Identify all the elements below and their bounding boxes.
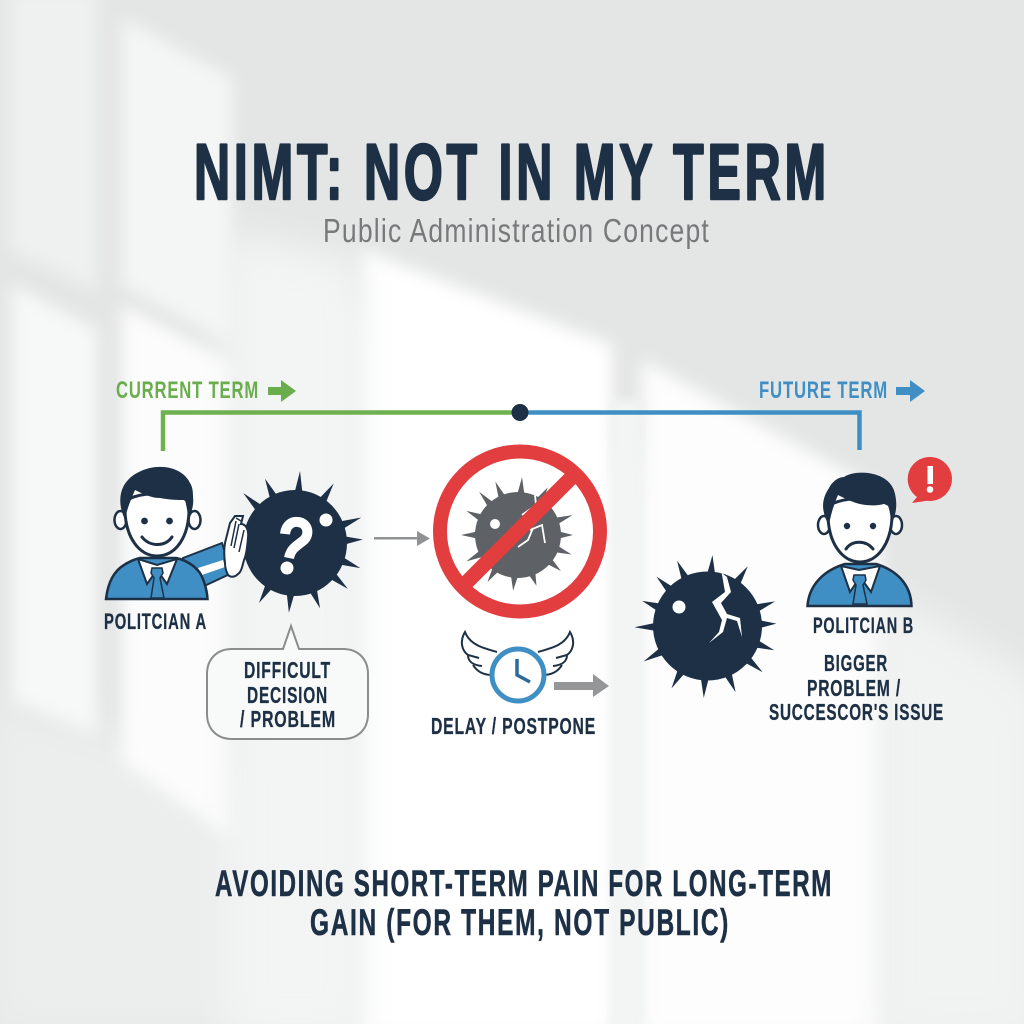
label: politician B: POLITCIAN B <box>813 613 914 638</box>
label: politician A: POLITCIAN A <box>104 609 207 634</box>
politician B figure <box>808 473 912 606</box>
politician A figure <box>106 467 232 599</box>
label: delay / postpone: DELAY / POSTPONE <box>431 713 596 739</box>
alert speech bubble <box>908 457 952 503</box>
callout: difficult decision <box>207 626 368 739</box>
hair <box>823 473 896 525</box>
timeline: current and future term <box>116 377 925 451</box>
label: bigger problem: PROBLEM / <box>807 675 901 701</box>
icon: green arrow <box>268 380 296 402</box>
tie <box>151 568 164 598</box>
takeaway statement <box>215 863 833 943</box>
jacket <box>106 558 208 599</box>
callout text <box>240 657 336 732</box>
takeaway statement: GAIN (FOR THEM, NOT PUBLIC) <box>310 902 730 943</box>
jacket <box>808 564 912 606</box>
left wing <box>462 632 497 675</box>
collar <box>138 559 177 584</box>
callout text: DIFFICULT <box>244 657 331 683</box>
exclamation mark <box>927 466 933 493</box>
eyes <box>844 523 876 529</box>
arm pushing away <box>183 543 232 588</box>
ball highlight <box>672 600 686 614</box>
callout text: DECISION <box>247 682 328 708</box>
spiky ball: bigger cracked problem <box>634 555 777 698</box>
face <box>125 494 189 556</box>
future term line <box>520 412 860 450</box>
timeline midpoint <box>512 404 528 421</box>
face <box>828 499 892 562</box>
hand pushing the problem <box>224 516 248 577</box>
icon: winged clock <box>462 632 573 701</box>
collar <box>841 566 880 592</box>
prohibited problem icon <box>440 452 600 612</box>
tie <box>853 575 867 604</box>
clock hands <box>517 659 530 682</box>
question mark <box>280 522 307 574</box>
icon: blue arrow <box>896 380 925 402</box>
ears <box>114 511 200 529</box>
finger lines <box>231 518 244 552</box>
future term label: FUTURE TERM <box>759 377 888 404</box>
label: bigger problem <box>769 650 944 725</box>
current term label: CURRENT TERM <box>116 377 259 404</box>
current term line <box>163 412 520 451</box>
clock face <box>492 649 544 701</box>
arrow: problem to prohibited <box>374 531 430 546</box>
hair <box>120 467 193 520</box>
eyes <box>141 518 173 524</box>
prohibition ring and slash <box>440 452 600 612</box>
subtitle: Public Administration Concept <box>323 212 710 249</box>
cracks <box>709 573 742 643</box>
arrow: delay forward <box>554 674 609 697</box>
smile <box>142 537 172 544</box>
callout text: / PROBLEM <box>240 706 336 732</box>
label: bigger problem: BIGGER <box>824 650 888 676</box>
shirt cuff stripe <box>198 560 225 575</box>
callout bubble <box>207 626 368 739</box>
frown <box>846 542 873 549</box>
right wing <box>538 632 573 675</box>
ears <box>818 516 902 534</box>
spiky ball: difficult problem <box>240 471 363 613</box>
cracks <box>518 495 545 547</box>
ball highlight <box>320 514 332 526</box>
grey spiky ball <box>461 477 574 591</box>
